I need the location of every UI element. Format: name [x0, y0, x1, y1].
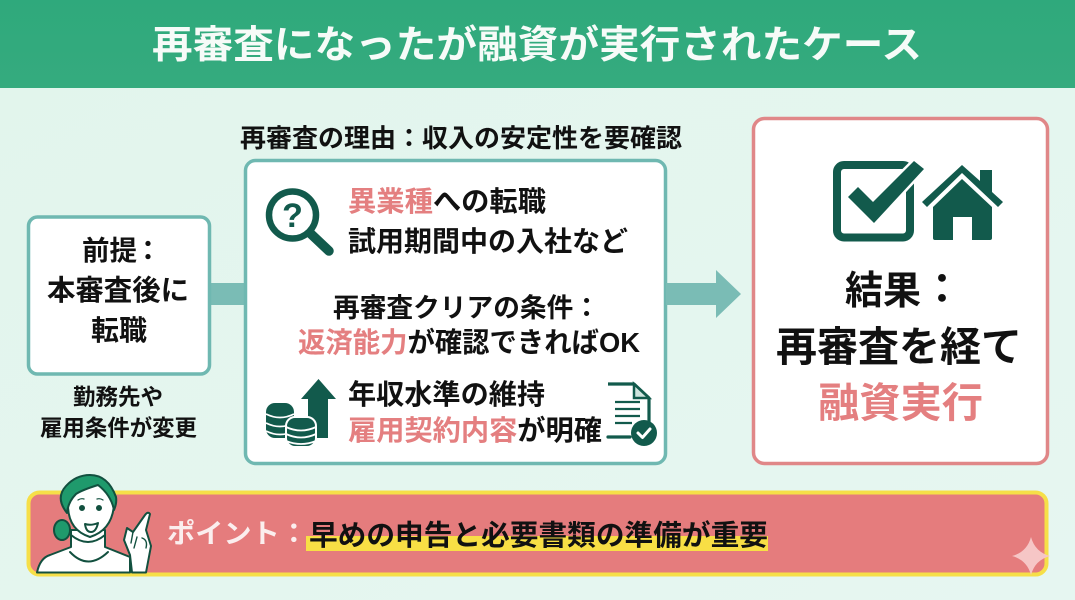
header banner — [0, 0, 1075, 88]
text: income and contract: 雇用契約内容が明確 — [348, 414, 602, 446]
icon: magnifier with question mark — [269, 192, 329, 251]
text: job change examples — [348, 186, 628, 257]
panel: premise: 本審査後に — [47, 275, 189, 307]
panel: re-review details — [246, 160, 666, 464]
heading: reason for re-review: 再審査の理由：収入の安定性を要確認 — [240, 125, 682, 153]
text: income and contract — [348, 379, 602, 446]
icon: sparkle — [1012, 537, 1050, 575]
text: income and contract: 年収水準の維持 — [348, 379, 545, 410]
panel: premise: 前提 — [82, 235, 137, 266]
note: workplace change: 雇用条件が変更 — [40, 415, 197, 441]
text: outcome: 融資実行 — [818, 380, 983, 426]
icon: magnifier with question mark: ? — [282, 197, 303, 235]
text: job change examples: 試用期間中の入社など — [348, 226, 628, 257]
highlight — [306, 536, 768, 551]
text: outcome: 結果 — [845, 270, 921, 313]
text: point message: 早めの申告と必要書類の準備が重要 — [309, 519, 768, 552]
callout: point — [28, 475, 1050, 575]
text: clearing conditions: 再審査クリアの条件： — [333, 293, 600, 323]
icon: coins and up arrow — [266, 379, 336, 447]
icon: document with check — [608, 384, 657, 446]
panel: result — [754, 118, 1048, 464]
title: 再審査になったが融資が実行されたケース — [152, 24, 922, 67]
text: outcome: ： — [922, 266, 962, 312]
panel: premise — [28, 217, 210, 374]
panel: premise: 転職 — [91, 315, 147, 346]
text: clearing conditions — [298, 293, 640, 358]
text: clearing conditions: 返済能力が確認できればOK — [298, 326, 640, 358]
text: point label: ポイント： — [167, 519, 308, 549]
note: workplace change — [40, 385, 197, 441]
note: workplace change: 勤務先や — [73, 385, 163, 410]
panel: premise: ： — [134, 235, 162, 266]
arrow: to result — [666, 270, 741, 318]
connector bar: premise to review — [209, 283, 247, 305]
text: outcome — [776, 266, 1022, 426]
text: outcome: 再審査を経て — [776, 324, 1022, 370]
icon: house — [922, 165, 1003, 240]
icon: checkbox — [837, 161, 924, 238]
text: job change examples: 異業種への転職 — [348, 186, 546, 217]
icon: woman pointing — [37, 475, 151, 572]
